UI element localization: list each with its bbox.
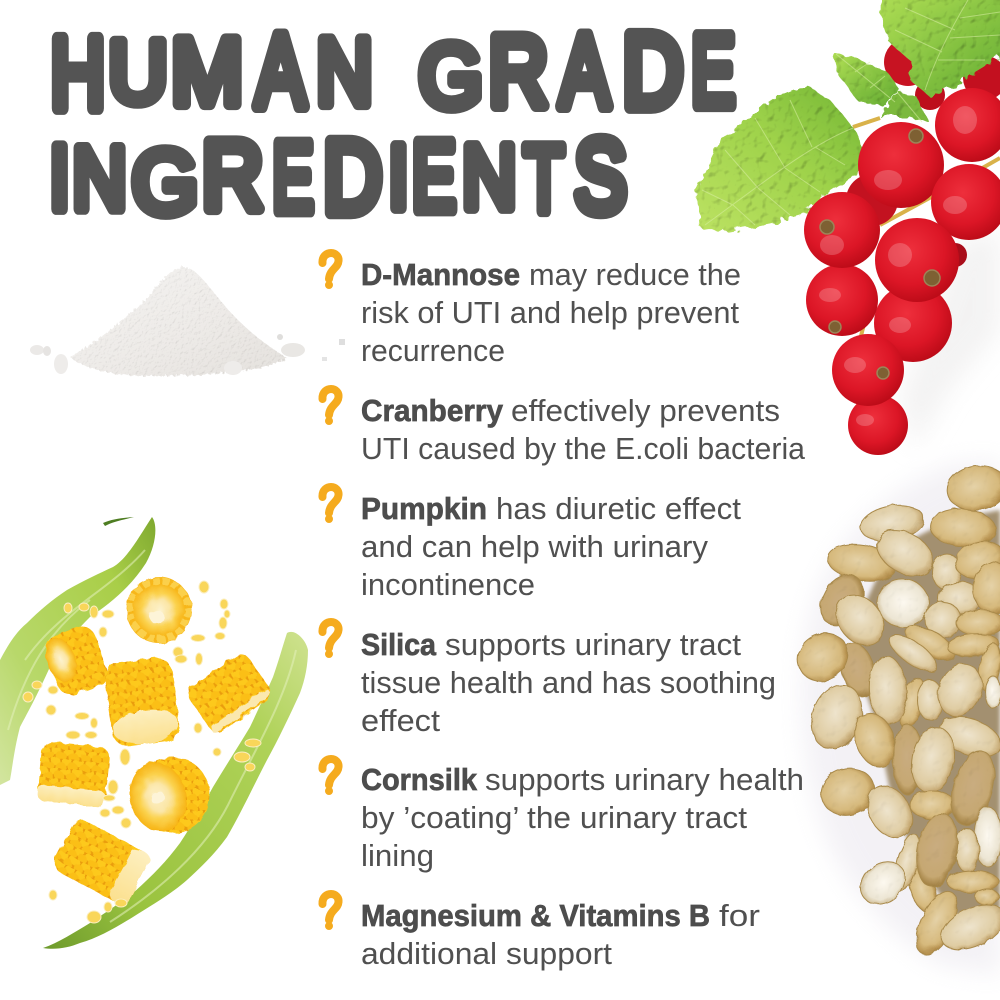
text block bbox=[361, 627, 776, 738]
icon: question mark bbox=[322, 759, 339, 795]
icon: question mark bbox=[322, 894, 339, 930]
title: I bbox=[49, 127, 70, 229]
text block: D-Mannose bbox=[361, 257, 520, 292]
text block: risk of UTI and help prevent bbox=[361, 295, 739, 330]
title: I bbox=[388, 126, 409, 228]
husk right bbox=[43, 632, 308, 949]
text block: has diuretic effect bbox=[496, 491, 741, 526]
text block: Cornsilk bbox=[361, 762, 478, 797]
corn chunk 1 bbox=[126, 577, 192, 643]
text block: lining bbox=[361, 838, 434, 873]
title bbox=[49, 13, 735, 235]
title: T bbox=[524, 127, 564, 232]
text block: for bbox=[719, 898, 760, 933]
title: N bbox=[316, 20, 373, 125]
text block bbox=[361, 393, 806, 466]
text block: incontinence bbox=[361, 567, 535, 602]
item: Magnesium and Vitamins B bbox=[322, 894, 760, 971]
title: D bbox=[323, 119, 382, 235]
back berries bbox=[846, 38, 1000, 267]
title: A bbox=[560, 13, 609, 129]
icon: question mark bbox=[322, 487, 339, 523]
title: R bbox=[489, 16, 548, 127]
corn chunk 5 bbox=[37, 741, 111, 807]
text block bbox=[361, 898, 760, 971]
leaf large bbox=[697, 85, 863, 232]
item: Cornsilk bbox=[322, 759, 804, 873]
text block: by ’coating’ the urinary tract bbox=[361, 800, 747, 835]
item: D-Mannose bbox=[322, 253, 741, 368]
seed shadow bbox=[802, 460, 1000, 975]
text block: effectively prevents bbox=[511, 393, 780, 428]
icon: question mark bbox=[322, 622, 339, 658]
title: R bbox=[202, 121, 263, 230]
seeds bbox=[789, 461, 1000, 961]
text block: UTI caused by the E.coli bacteria bbox=[361, 431, 806, 466]
title: N bbox=[72, 128, 127, 228]
soft shadow bbox=[900, 230, 1000, 450]
leaf small bbox=[833, 52, 930, 123]
loose corn kernels bbox=[23, 581, 261, 923]
corn chunk 4 bbox=[184, 650, 274, 736]
text block: tissue health and has soothing bbox=[361, 665, 776, 700]
text block: recurrence bbox=[361, 333, 505, 368]
corn chunk 3 bbox=[103, 656, 182, 748]
title: E bbox=[412, 121, 456, 231]
leaf top bbox=[880, 0, 1000, 97]
corn chunk 2 bbox=[39, 623, 111, 699]
title: G bbox=[419, 27, 483, 127]
text block: Magnesium & Vitamins B bbox=[361, 898, 710, 933]
title: D bbox=[623, 13, 683, 130]
item: Silica bbox=[322, 622, 776, 738]
text block bbox=[361, 257, 741, 368]
seed pile backing bbox=[855, 510, 1000, 920]
image: red berries and leaves bbox=[697, 0, 1000, 455]
text block: supports urinary health bbox=[485, 762, 804, 797]
icon: question mark bbox=[322, 253, 339, 289]
image: pumpkin seeds bbox=[789, 460, 1000, 975]
corn chunk 7 bbox=[51, 816, 152, 907]
text block: Cranberry bbox=[361, 393, 504, 428]
text block: additional support bbox=[361, 936, 612, 971]
title: M bbox=[171, 20, 243, 125]
husk left bbox=[0, 517, 155, 785]
title: A bbox=[256, 13, 305, 129]
berry calyx spots bbox=[820, 129, 940, 379]
text block: Silica bbox=[361, 627, 437, 662]
text block: Pumpkin bbox=[361, 491, 487, 526]
icon: question mark bbox=[322, 389, 339, 425]
stem bbox=[853, 118, 1000, 340]
text block bbox=[361, 762, 804, 873]
item: Pumpkin bbox=[322, 487, 741, 602]
item: Cranberry bbox=[322, 389, 806, 466]
text block bbox=[361, 491, 741, 602]
husk tip bbox=[103, 517, 134, 526]
text block: effect bbox=[361, 703, 440, 738]
image: powder pile bbox=[30, 267, 345, 376]
title: U bbox=[108, 23, 168, 122]
front berries bbox=[804, 88, 1000, 455]
title: H bbox=[50, 17, 105, 130]
corn chunk 6 bbox=[122, 756, 210, 838]
title: E bbox=[272, 122, 314, 232]
image: corn and husks bbox=[0, 517, 308, 949]
text block: and can help with urinary bbox=[361, 529, 708, 564]
title: G bbox=[132, 132, 198, 233]
text block: supports urinary tract bbox=[445, 627, 741, 662]
title: N bbox=[462, 127, 517, 227]
text block: may reduce the bbox=[529, 257, 741, 292]
title: E bbox=[691, 14, 735, 128]
title: S bbox=[574, 119, 627, 234]
